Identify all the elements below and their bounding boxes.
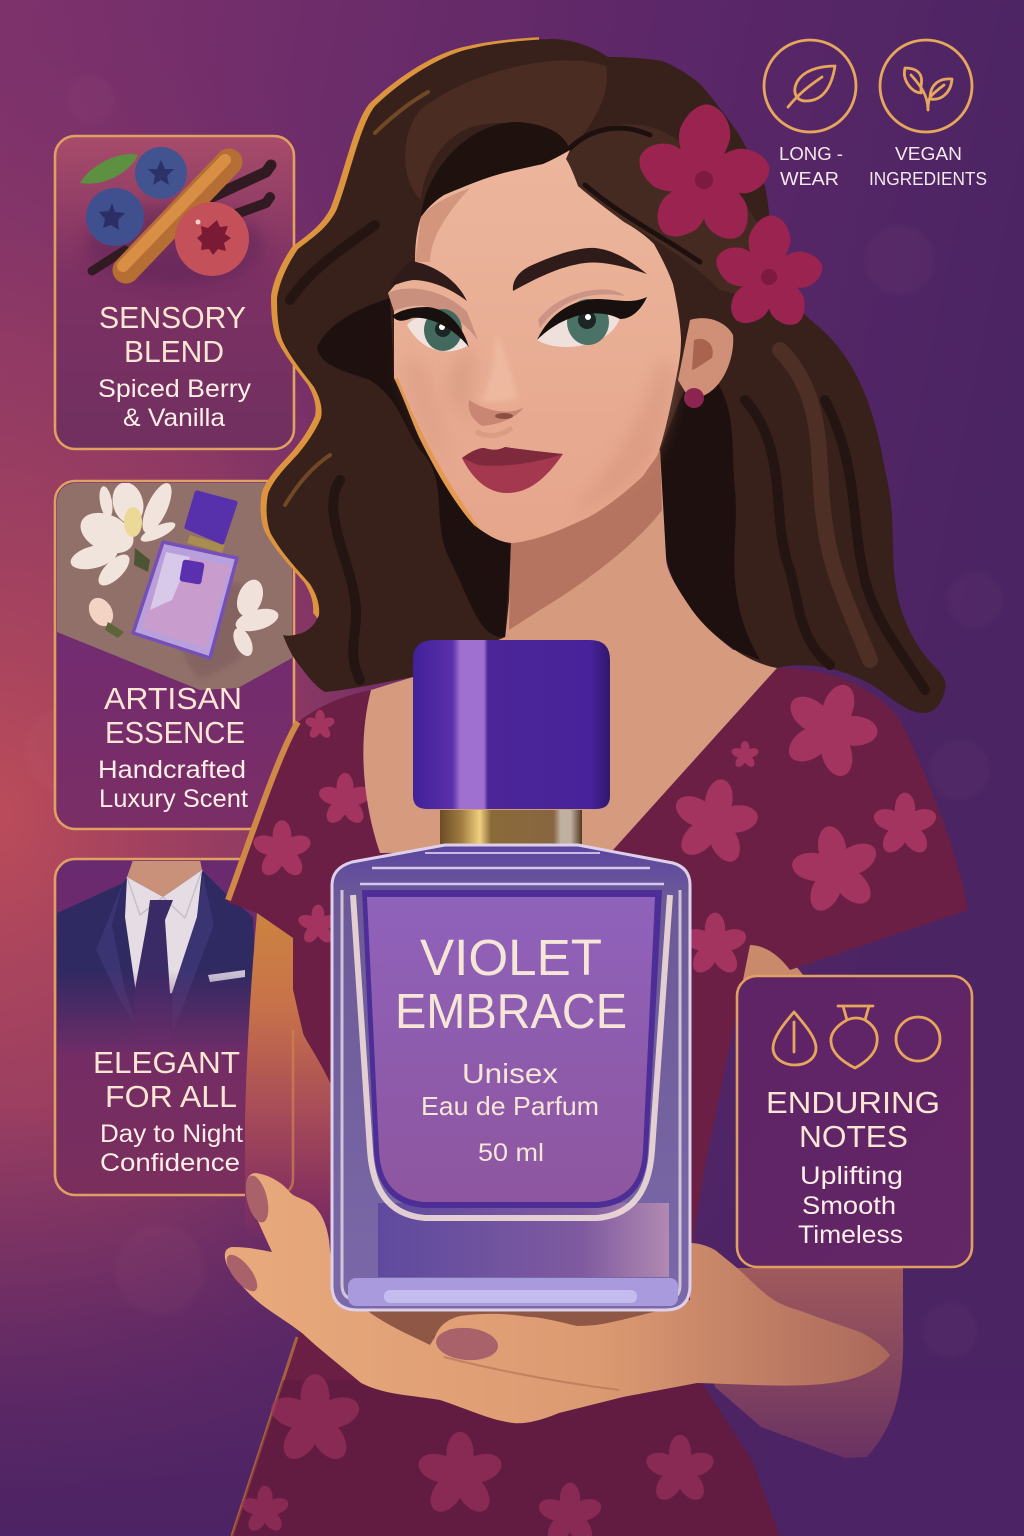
text block: Smooth bbox=[802, 1192, 896, 1220]
text block: Handcrafted bbox=[98, 756, 246, 784]
bottle label: Eau de Parfum bbox=[421, 1091, 599, 1121]
bottle label: EMBRACE bbox=[395, 985, 627, 1039]
chest bbox=[363, 637, 777, 853]
glass body bbox=[332, 845, 690, 1310]
text block bbox=[98, 756, 248, 813]
nose bbox=[469, 330, 524, 435]
text block: Uplifting bbox=[800, 1162, 903, 1190]
bottle label: VIOLET bbox=[420, 929, 602, 986]
right eye bbox=[537, 297, 647, 347]
bottle label: 50 ml bbox=[478, 1139, 544, 1167]
dress bbox=[227, 668, 968, 1536]
label bbox=[869, 144, 987, 189]
heading: ESSENCE bbox=[105, 715, 245, 750]
heading bbox=[104, 681, 245, 750]
hair flowers bbox=[632, 104, 826, 332]
icon: leaf bbox=[764, 40, 856, 132]
bottle cap bbox=[413, 640, 610, 809]
left eye bbox=[392, 307, 469, 351]
hand holding bottle bbox=[221, 1173, 890, 1423]
bottle label bbox=[353, 890, 670, 1218]
text block: Spiced Berry bbox=[98, 375, 252, 403]
gold collar bbox=[440, 810, 582, 844]
neck bbox=[505, 450, 740, 655]
right forearm bbox=[690, 1268, 903, 1458]
text block: & Vanilla bbox=[123, 404, 225, 432]
figure: woman bbox=[221, 37, 968, 1536]
ear and earring bbox=[678, 318, 733, 408]
icon: berries, cinnamon and vanilla bbox=[80, 147, 271, 285]
text block: Timeless bbox=[798, 1221, 903, 1249]
text block bbox=[798, 1162, 903, 1249]
nails bbox=[221, 1173, 499, 1363]
panel: sensory blend bbox=[55, 136, 294, 449]
image: perfume with flowers on cloth bbox=[57, 479, 292, 690]
heading bbox=[766, 1085, 940, 1154]
label bbox=[779, 144, 843, 189]
label: LONG - bbox=[779, 144, 843, 164]
hair bbox=[261, 37, 946, 713]
heading: ELEGANT bbox=[93, 1045, 240, 1080]
heading: NOTES bbox=[799, 1119, 908, 1154]
heading: SENSORY bbox=[99, 300, 246, 335]
face shading bbox=[415, 188, 470, 262]
hair shading bbox=[317, 298, 511, 637]
label: VEGAN bbox=[895, 144, 962, 164]
text block: Day to Night bbox=[100, 1120, 243, 1148]
heading bbox=[99, 300, 246, 369]
text block: Confidence bbox=[100, 1149, 240, 1177]
right upper arm bbox=[740, 945, 805, 985]
label: INGREDIENTS bbox=[869, 169, 987, 189]
bottle label: Unisex bbox=[462, 1058, 558, 1089]
badge: long-wear bbox=[764, 40, 856, 189]
dress flowers bbox=[240, 668, 939, 1536]
panel: enduring notes bbox=[737, 976, 972, 1267]
panel: elegant for all bbox=[55, 859, 294, 1195]
eye shadows bbox=[388, 289, 478, 340]
left arm bbox=[245, 913, 334, 1240]
eyebrows bbox=[390, 248, 647, 301]
text block bbox=[98, 375, 252, 432]
text block bbox=[100, 1120, 243, 1177]
face bbox=[388, 150, 681, 543]
text block: Luxury Scent bbox=[99, 785, 248, 813]
heading: BLEND bbox=[124, 334, 224, 369]
panel: artisan essence bbox=[55, 479, 294, 829]
heading bbox=[93, 1045, 240, 1114]
image: man in a suit bbox=[57, 860, 258, 1052]
heading: ARTISAN bbox=[104, 681, 242, 716]
lips bbox=[462, 447, 563, 493]
heading: ENDURING bbox=[766, 1085, 940, 1120]
heading: FOR ALL bbox=[105, 1079, 237, 1114]
icon: sprout bbox=[880, 40, 972, 132]
thumb bbox=[434, 1306, 708, 1390]
bottle bbox=[332, 640, 690, 1310]
label: WEAR bbox=[780, 169, 839, 189]
badge: vegan ingredients bbox=[869, 40, 987, 189]
icons: notes bbox=[773, 1006, 940, 1068]
